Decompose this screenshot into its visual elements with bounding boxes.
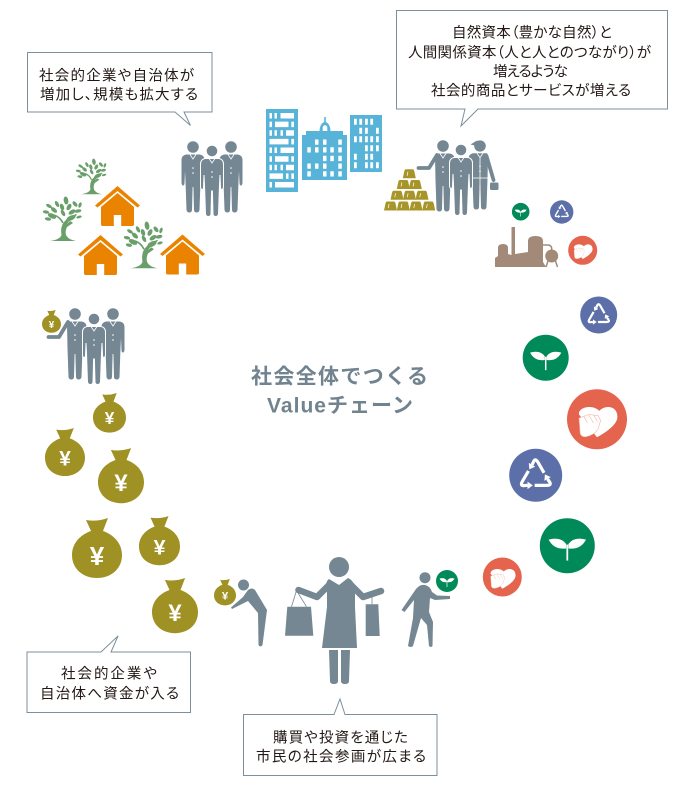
icon: small sprout badge [512,203,530,220]
icon group: blue buildings [266,109,382,192]
icon: woman shopping with bags [285,557,381,684]
icon group: money bags: ¥ [59,448,71,471]
callout: citizen participation: 市民の社会参画が広まる [256,748,426,765]
icon: sprout badge, upper [523,335,569,381]
callout: natural and human capital: 社会的商品とサービスが増える [431,82,631,99]
icon group: three people holding money bag, left [48,308,124,384]
callout: citizen participation [244,699,437,776]
icon: large sprout badge [540,518,595,573]
icon group: money bags: ¥ [222,591,229,603]
callout: citizen participation: 購買や投資を通じた [273,729,408,746]
icon: heart badge, lower [483,558,522,596]
callout: funds flow to enterprises: 社会的企業や [61,665,157,682]
icon group: houses [78,186,205,275]
callout: funds flow to enterprises [27,636,190,712]
callout: natural and human capital: 増えるような [493,63,568,80]
icon group: money bags: ¥ [105,408,115,428]
icon group: trees [43,158,163,268]
icon group: three people, top right [418,140,498,216]
callout: natural and human capital: 自然資本（豊かな自然）と [452,24,612,41]
icon: factory [495,227,558,267]
callout: social enterprises and municipalities grow: 増加し、規模も拡大する [40,86,198,103]
center title: Valueチェーン [267,394,413,418]
callout: social enterprises and municipalities grow: 社会的企業や自治体が [39,67,195,84]
icon: small recycle badge [550,200,573,224]
icon: domed building [302,117,347,180]
center title: 社会全体でつくる [251,366,428,388]
icon group: money bags: ¥ [168,600,182,627]
center title [251,366,428,418]
icon: large recycle badge, upper right [580,296,617,334]
icon: large recycle badge [509,449,562,502]
icon group: money bags: ¥ [49,320,55,331]
icon: large heart badge [567,389,627,449]
icon group: money bags: ¥ [114,470,128,497]
callout: natural and human capital [396,10,668,126]
icon: small heart badge [568,236,597,265]
callout: funds flow to enterprises: 自治体へ資金が入る [40,685,179,702]
callout: natural and human capital: 人間関係資本（人と人とのつながり）が [408,44,652,61]
icon: person holding sprout badge [402,570,458,647]
callout: social enterprises and municipalities grow [28,52,212,126]
icon group: money bags [42,310,236,633]
icon: tall building [266,109,298,192]
icon: office block [350,115,382,172]
icon group: money bags: ¥ [90,541,105,571]
icon group: money bags: ¥ [154,536,166,560]
icon group: three business people, top [182,141,242,216]
icon: stack of gold bars [384,169,435,210]
icon: person bowing with money bag [231,580,267,646]
